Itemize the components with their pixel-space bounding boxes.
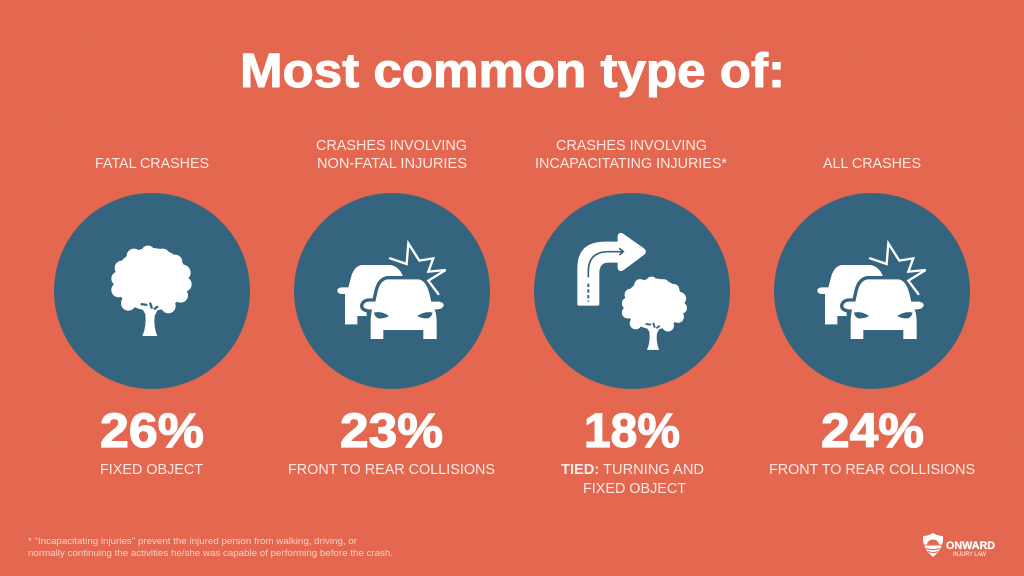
icon: turning arrow bbox=[579, 235, 644, 304]
number: 23%: 23% bbox=[340, 405, 443, 458]
number: 24%: 24% bbox=[821, 405, 924, 458]
circle: all crashes bbox=[774, 193, 970, 389]
caption: front to rear collisions: FRONT TO REAR COLLISIONS bbox=[288, 462, 495, 478]
number: 26%: 26% bbox=[100, 405, 204, 458]
circle: incapacitating injuries bbox=[534, 193, 730, 389]
caption: tied turning and fixed object: FIXED OBJECT bbox=[583, 481, 686, 497]
label: incapacitating injuries bbox=[535, 138, 727, 172]
circle: fatal crashes bbox=[54, 193, 250, 389]
icon: tree bbox=[111, 246, 192, 336]
label: all crashes: ALL CRASHES bbox=[823, 156, 921, 172]
icon: shield bbox=[923, 533, 943, 557]
caption: tied turning and fixed object bbox=[561, 462, 704, 497]
label: incapacitating injuries: CRASHES INVOLVING bbox=[556, 138, 707, 154]
footnote bbox=[28, 536, 393, 558]
label: fatal crashes: FATAL CRASHES bbox=[95, 156, 209, 172]
label: incapacitating injuries: INCAPACITATING INJURIES* bbox=[535, 156, 727, 172]
icon: tree bbox=[622, 277, 687, 350]
icon: rear-end collision bbox=[817, 243, 926, 339]
caption: fixed object: FIXED OBJECT bbox=[100, 462, 203, 478]
circle: non-fatal injuries bbox=[294, 193, 490, 389]
panel: incapacitating injuries bbox=[534, 138, 730, 497]
label: non-fatal injuries bbox=[316, 138, 467, 172]
panel: fatal crashes bbox=[54, 156, 250, 478]
icon: rear-end collision bbox=[337, 243, 446, 339]
wordmark: ONWARD bbox=[946, 540, 995, 552]
logo: Onward Injury Law bbox=[923, 533, 995, 558]
title: Most common type of: bbox=[240, 45, 785, 98]
panel: all crashes bbox=[769, 156, 975, 478]
label: non-fatal injuries: CRASHES INVOLVING bbox=[316, 138, 467, 154]
footnote: normally continuing the activities he/she was capable of performing before the crash. bbox=[28, 548, 393, 558]
tagline: INJURY LAW bbox=[953, 552, 986, 558]
caption: front to rear collisions: FRONT TO REAR COLLISIONS bbox=[769, 462, 975, 478]
caption: tied turning and fixed object: TIED: TURNING AND bbox=[561, 462, 704, 478]
footnote: * "Incapacitating injuries" prevent the injured person from walking, driving, or bbox=[28, 536, 357, 546]
label: non-fatal injuries: NON-FATAL INJURIES bbox=[317, 156, 467, 172]
number: 18%: 18% bbox=[584, 405, 680, 458]
panel: non-fatal injuries bbox=[288, 138, 495, 478]
